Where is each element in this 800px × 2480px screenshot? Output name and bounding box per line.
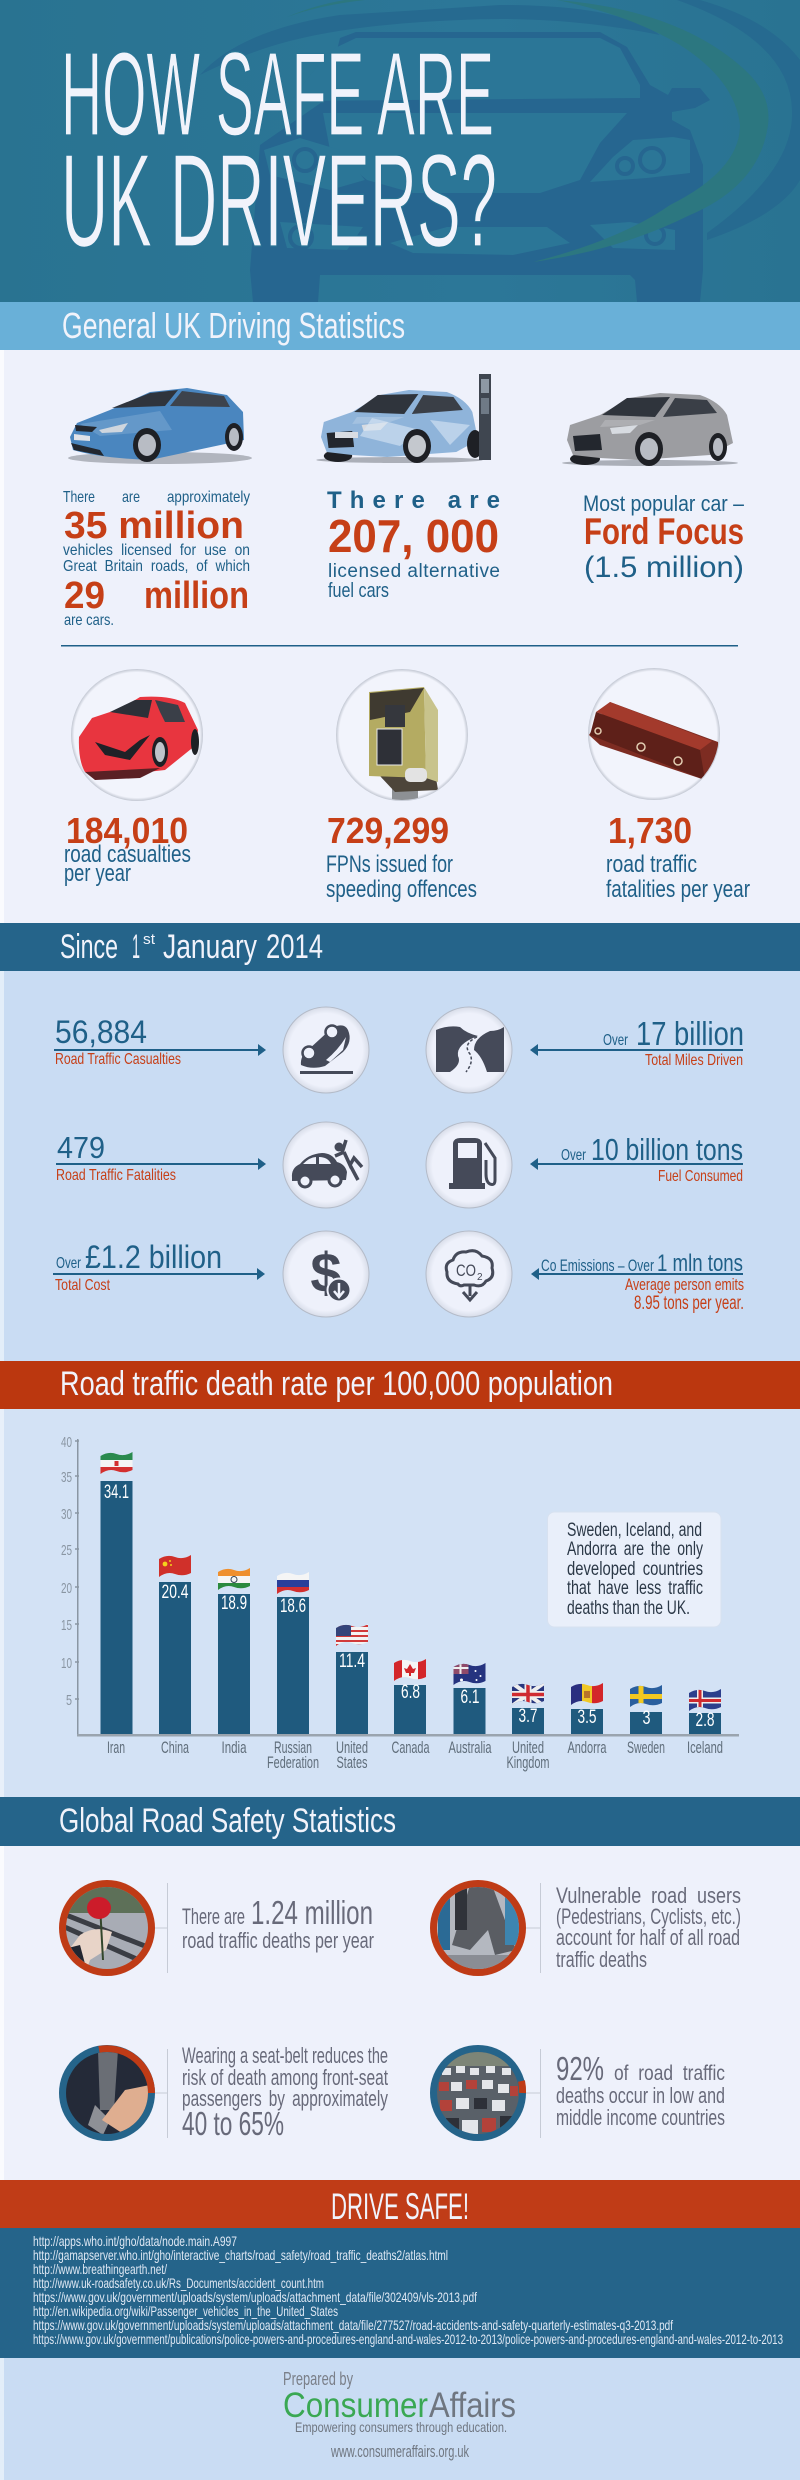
stat: total cost: £1.2 billion [85, 1239, 222, 1275]
panel: sources: http://apps.who.int/gho/data/node.main.A997 [33, 2233, 237, 2249]
arrow [530, 1044, 743, 1056]
bar: India [218, 1568, 250, 1757]
stat: road traffic fatalities: 479 [57, 1130, 105, 1165]
photo: traffic jam [430, 2045, 526, 2141]
panel: header [0, 0, 800, 302]
stat text: traffic deaths [556, 1947, 647, 1972]
stat text: 207, 000 [328, 510, 499, 562]
bar: Iceland: 2.8 [696, 1710, 714, 1731]
stat text [556, 2050, 725, 2130]
stat: fatalities: road traffic [606, 851, 697, 878]
panel: sources: https://www.gov.uk/government/uploads/system/uploads/attachment_data/file/302409/vls-2013.pdf [33, 2289, 477, 2305]
column: most popular car [562, 393, 745, 584]
stat text [63, 489, 250, 629]
stat: CO emissions [531, 1250, 744, 1314]
image: crashed red car [71, 669, 203, 801]
stat text [327, 487, 500, 602]
section heading: Since 1st January 2014: January [163, 928, 257, 966]
photo: pedestrians [430, 1880, 526, 1977]
stat: road traffic casualties [54, 1014, 266, 1068]
y axis: 35 [61, 1469, 72, 1486]
stat text: licensed alternative [328, 561, 500, 582]
icon: money falling: $ [310, 1241, 342, 1304]
bar: Australia: Australia [448, 1738, 492, 1757]
stat: vulnerable road users [430, 1880, 741, 1977]
image: blue car [68, 388, 252, 464]
logo: ConsumerAffairs: Consumer [283, 2386, 428, 2425]
bar: United States: States [336, 1753, 368, 1772]
bar: China: 20.4 [162, 1582, 189, 1603]
stat: seat-belt [59, 2043, 388, 2142]
stat: fatalities: 1,730 [608, 810, 692, 851]
section heading: Since 1st January 2014: Since [60, 928, 118, 966]
panel: global statistics [0, 1846, 800, 2180]
stat: road casualties: road casualties [64, 841, 191, 868]
section heading: Since 1st January 2014: 1 [132, 928, 140, 966]
y axis: 20 [61, 1580, 72, 1597]
arrow [54, 1044, 266, 1056]
section heading: Since 1st January 2014 [0, 923, 800, 971]
stat text: passengers by approximately [182, 2086, 388, 2111]
y axis: 30 [61, 1506, 72, 1523]
stat: fuel consumed: 10 billion tons [591, 1132, 743, 1167]
bar: Australia [448, 1663, 492, 1757]
icon: CO2 cloud [426, 1231, 512, 1317]
icon: CO2 cloud: 2 [477, 1272, 483, 1283]
bar: Canada: Canada [392, 1738, 430, 1757]
stat text: approximately [167, 489, 250, 506]
stat: road casualties: per year [64, 860, 131, 887]
y axis [61, 1434, 79, 1735]
logo: ConsumerAffairs [283, 2386, 516, 2425]
icon: CO2 cloud: CO [456, 1261, 476, 1280]
stat: road traffic casualties: Road Traffic Casualties [55, 1051, 181, 1068]
panel: footer: Empowering consumers through education. [295, 2419, 507, 2435]
stat text: deaths occur in low and [556, 2083, 725, 2108]
panel: general statistics [0, 350, 800, 923]
stat: total miles driven [530, 1015, 744, 1069]
panel: death rate chart [0, 1409, 800, 1797]
stat: speeding FPNs: 729,299 [327, 810, 449, 851]
stat text: 29 [64, 575, 105, 617]
stat: road traffic casualties: 56,884 [55, 1014, 147, 1050]
stat: total cost: Over [56, 1255, 81, 1272]
stat text: There are [182, 1904, 245, 1929]
callout: Andorra are the only [567, 1539, 703, 1560]
stat: road traffic fatalities: Road Traffic Fatalities [56, 1167, 176, 1184]
banner: drive safe: DRIVE SAFE! [331, 2186, 469, 2227]
swoosh bands [200, 0, 800, 240]
panel: sources [0, 2228, 800, 2358]
stat text: Wearing a seat-belt reduces the [182, 2043, 388, 2068]
stat text: risk of death among front-seat [182, 2065, 388, 2090]
stat text: (1.5 million) [584, 551, 744, 584]
bar: Sweden: Sweden [627, 1738, 665, 1757]
stat text [182, 1894, 374, 1953]
bar: United Kingdom: United [512, 1738, 544, 1757]
stat text: road traffic deaths per year [182, 1928, 374, 1953]
section heading: General UK Driving Statistics: General UK Driving Statistics [62, 305, 405, 346]
bar: India: India [222, 1738, 247, 1757]
stat text: Most popular car – [583, 491, 745, 516]
callout: deaths than the UK. [567, 1598, 690, 1619]
stat text: are [122, 489, 140, 506]
image: hybrid car and charger [316, 374, 491, 463]
stat: speeding FPNs: speeding offences [326, 876, 477, 903]
stat text: million [144, 575, 249, 617]
callout: Sweden, Iceland, and [567, 1520, 702, 1541]
bar: United States: 11.4 [339, 1651, 365, 1672]
arrow [56, 1158, 266, 1170]
bar: Iceland [687, 1689, 723, 1757]
stat: fuel consumed [530, 1132, 743, 1185]
image: coffin [588, 668, 720, 800]
bar: Sweden [627, 1685, 665, 1757]
stat: total cost [53, 1239, 265, 1294]
stat: 1.24 million deaths [59, 1880, 374, 1976]
stat text: vehicles licensed for use on [63, 542, 250, 559]
stat: speeding FPNs [326, 669, 477, 903]
photo: hand holding rose [59, 1880, 155, 1976]
bar: United Kingdom: Kingdom [506, 1753, 550, 1772]
stat text: 40 to 65% [182, 2105, 284, 2142]
icon: winding road [426, 1007, 512, 1093]
stat: total miles driven: 17 billion [636, 1015, 744, 1052]
panel: sources: http://www.uk-roadsafety.co.uk/Rs_Documents/accident_count.htm [33, 2275, 324, 2291]
section heading: Since 1st January 2014: st [143, 931, 156, 948]
bar: India: 18.9 [221, 1593, 247, 1614]
stat text: are cars. [64, 612, 114, 629]
y axis: 40 [61, 1434, 72, 1451]
stat: CO emissions: Co Emissions – Over [541, 1256, 654, 1275]
stat text: There are [327, 487, 500, 514]
section heading: Global Road Safety Statistics [0, 1797, 800, 1846]
stat text: 1.24 million [251, 1894, 373, 1931]
y axis: 15 [61, 1617, 72, 1634]
stat: fuel consumed: Over [561, 1147, 586, 1164]
bar: United Kingdom: 3.7 [518, 1706, 538, 1727]
logo: ConsumerAffairs: Affairs [429, 2386, 516, 2425]
panel: sources: http://www.breathingearth.net/ [33, 2261, 167, 2277]
stat text [182, 2043, 388, 2142]
panel: footer: Prepared by [283, 2369, 353, 2389]
section heading: road traffic death rate: Road traffic death rate per 100,000 population [60, 1365, 613, 1403]
stat text: fuel cars [328, 580, 389, 602]
icon: fuel pump [426, 1122, 512, 1208]
image: speed camera [336, 669, 468, 805]
stat text: 92% [556, 2050, 604, 2087]
callout [548, 1512, 721, 1627]
arrow [53, 1268, 265, 1280]
stat: 92% low and middle income [430, 2045, 725, 2141]
stat: fuel consumed: Fuel Consumed [658, 1168, 743, 1185]
stat: CO emissions: Average person emits [625, 1275, 744, 1294]
bar: Canada [392, 1659, 430, 1757]
panel: sources: http://gamapserver.who.int/gho/interactive_charts/road_safety/road_traffic_deaths2/atlas.html [33, 2247, 448, 2263]
bar: Iran [100, 1452, 132, 1757]
stat: CO emissions: 1 mln tons [657, 1250, 743, 1277]
stat text: 35 million [64, 505, 244, 547]
bar: Australia: 6.1 [460, 1687, 480, 1708]
stat: total cost: Total Cost [55, 1277, 110, 1294]
y axis: 25 [61, 1542, 72, 1559]
section heading: Since 1st January 2014: 2014 [266, 928, 323, 966]
stat: total miles driven: Over [603, 1032, 628, 1049]
column: vehicles licensed [63, 388, 252, 629]
stat: road casualties [64, 669, 203, 887]
y axis: 10 [61, 1655, 72, 1672]
section heading: Global Road Safety Statistics: Global Road Safety Statistics [59, 1802, 396, 1840]
bar: Iran: 34.1 [104, 1482, 129, 1503]
section heading: General UK Driving Statistics [0, 302, 800, 350]
title [61, 28, 497, 274]
bar: United Kingdom [506, 1683, 550, 1772]
section heading: road traffic death rate [0, 1361, 800, 1409]
panel: since 1 January statistics [0, 971, 800, 1361]
icon: money falling [283, 1231, 369, 1317]
stat text: Great Britain roads, of which [63, 558, 250, 575]
stat: road traffic fatalities [56, 1130, 266, 1184]
bar: China [159, 1555, 191, 1757]
arrow [531, 1268, 743, 1280]
bar: Iran: Iran [107, 1738, 125, 1757]
arrow [530, 1158, 743, 1170]
banner: drive safe [0, 2180, 800, 2228]
image: silver car [562, 393, 738, 466]
y axis: 5 [66, 1692, 72, 1709]
stat text: Ford Focus [584, 511, 744, 552]
panel: footer: www.consumeraffairs.org.uk [330, 2442, 469, 2461]
stat: road casualties: 184,010 [66, 810, 188, 851]
photo: seat belt [59, 2045, 155, 2141]
bar: China: China [161, 1738, 189, 1757]
icon: car hitting pedestrian [283, 1122, 369, 1208]
bar chart [61, 1434, 739, 1772]
panel: footer [0, 2358, 800, 2480]
stat: CO emissions: 8.95 tons per year. [634, 1293, 744, 1314]
bar: Russian Federation [267, 1572, 319, 1772]
car silhouette background [250, 32, 710, 302]
bar: Andorra: 3.5 [578, 1707, 596, 1728]
bar: Iceland: Iceland [687, 1738, 723, 1757]
stat text: middle income countries [556, 2105, 725, 2130]
bar: Andorra [568, 1683, 607, 1757]
bar: Russian Federation: Russian [274, 1738, 312, 1757]
panel: sources: http://en.wikipedia.org/wiki/Passenger_vehicles_in_the_United_States [33, 2303, 338, 2319]
stat text [583, 491, 745, 584]
bar: Russian Federation: 18.6 [280, 1596, 306, 1617]
teal swoosh [287, 0, 769, 262]
stat text [556, 1883, 741, 1972]
bar: Russian Federation: Federation [267, 1753, 319, 1772]
bar: Canada: 6.8 [401, 1682, 420, 1703]
stat: total miles driven: Total Miles Driven [645, 1052, 743, 1069]
stat: fatalities: fatalities per year [606, 876, 750, 903]
callout: that have less traffic [567, 1578, 703, 1599]
bar: Sweden: 3 [642, 1708, 650, 1729]
stat: fatalities [588, 668, 750, 903]
stat: speeding FPNs: FPNs issued for [326, 851, 453, 878]
callout: developed countries [567, 1559, 703, 1580]
bar: United States [336, 1624, 368, 1772]
stat text: Vulnerable road users [556, 1883, 741, 1908]
bar: Andorra: Andorra [568, 1738, 607, 1757]
column: alternative fuel cars [316, 374, 500, 602]
bar: United States: United [336, 1738, 368, 1757]
stat text: of road traffic [614, 2062, 725, 2085]
stat text: There [63, 489, 95, 506]
icon: overturned car [283, 1007, 369, 1093]
